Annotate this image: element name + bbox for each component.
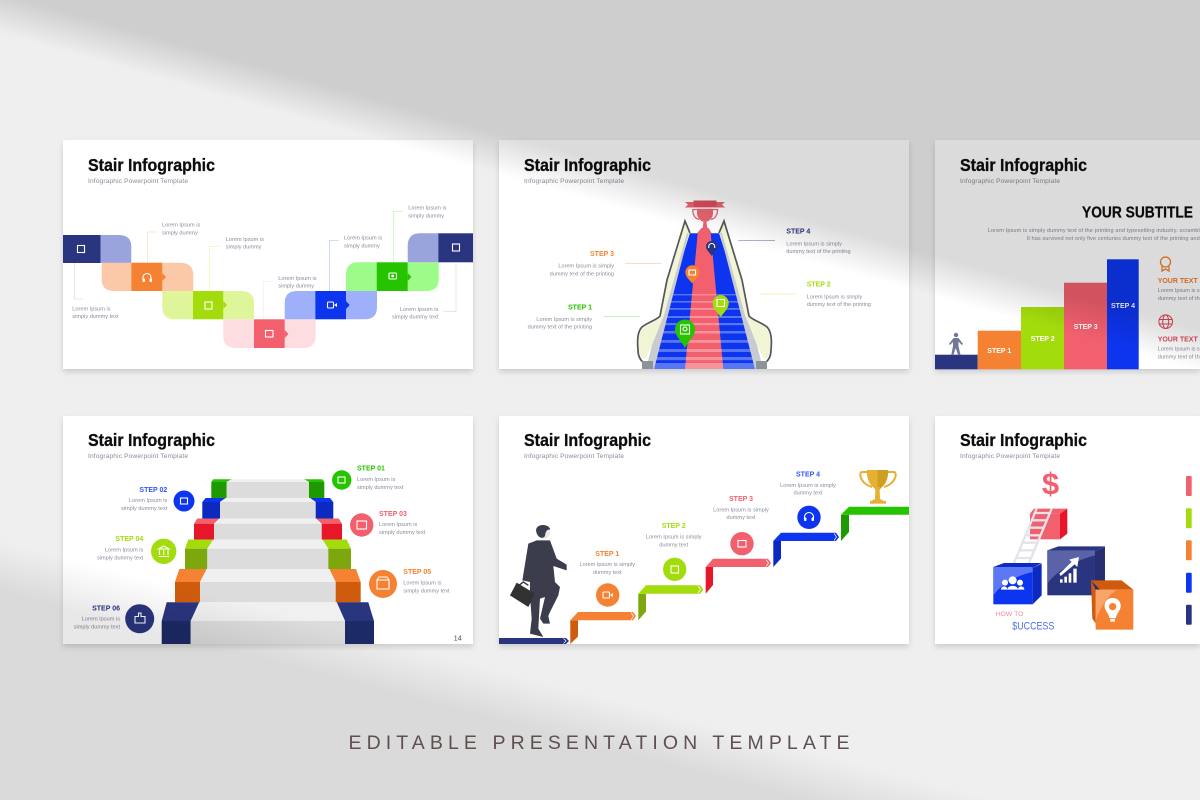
3D staircase — [162, 479, 374, 644]
step labels — [528, 228, 871, 331]
subheading: Infographic Powerpoint Template — [524, 453, 624, 460]
step 05: simply dummy text — [403, 588, 450, 594]
icons — [78, 244, 460, 337]
step 1 — [579, 551, 635, 607]
step 03 — [350, 511, 426, 537]
step labels: dummy text of the printing — [807, 302, 871, 308]
step labels: Lorem Ipsum is simply — [536, 317, 592, 323]
bar stairs chart: STEP 1 — [987, 348, 1011, 355]
step 04: Lorem Ipsum is — [105, 548, 143, 554]
step 06 — [74, 604, 154, 633]
step 02: STEP 02 — [139, 487, 167, 494]
callout text: simply dummy text — [72, 314, 119, 320]
step labels: dummy text of the printing — [550, 272, 614, 278]
3D boxes with ladder — [993, 509, 1133, 630]
step labels: STEP 2 — [807, 282, 831, 289]
panel: ribbon stairs slide — [499, 416, 909, 644]
callout text — [72, 206, 447, 321]
success label: $UCCESS — [1012, 620, 1054, 632]
callout lines — [74, 211, 456, 319]
heading: Stair Infographic — [524, 430, 651, 450]
winding stair chart — [63, 206, 473, 348]
step labels: STEP 3 — [590, 251, 614, 258]
panel: 3D stairs slide — [63, 416, 473, 644]
feature one text — [1158, 278, 1200, 302]
step 03: Lorem Ipsum is — [379, 522, 417, 528]
feature one text: YOUR TEXT — [1158, 278, 1198, 285]
step labels: dummy text of the printing — [528, 325, 592, 331]
step 2: dummy text — [659, 542, 689, 548]
how to label: HOW TO — [996, 611, 1023, 618]
step 4: dummy text — [794, 491, 823, 497]
step 4: STEP 4 — [796, 472, 820, 478]
step 06: Lorem Ipsum is — [82, 617, 120, 623]
callout text: simply dummy — [408, 214, 444, 220]
subheading: Infographic Powerpoint Template — [524, 178, 624, 185]
escalator — [638, 221, 771, 369]
intro text — [988, 228, 1200, 242]
callout text: Lorem Ipsum is — [226, 237, 264, 243]
step 3: dummy text — [727, 515, 756, 521]
step 1: STEP 1 — [595, 551, 619, 558]
callout text: Lorem Ipsum is — [400, 307, 438, 313]
heading: Stair Infographic — [524, 155, 651, 175]
heading: Stair Infographic — [960, 430, 1087, 450]
step 04 — [97, 536, 176, 564]
step 01: STEP 01 — [357, 466, 385, 473]
map pins — [675, 241, 729, 348]
step 3 — [713, 496, 769, 555]
panel: bar stairs slide — [935, 140, 1200, 369]
step labels: STEP 4 — [786, 228, 810, 235]
businessman climbing — [510, 525, 567, 637]
feature two text: Lorem Ipsum is s — [1158, 347, 1200, 353]
step 4: Lorem Ipsum is simply — [780, 483, 836, 489]
intro text: It has survived not only five centuries dummy text of the printing and — [1027, 236, 1200, 242]
step 02: Lorem Ipsum is — [129, 498, 167, 504]
step 2: Lorem Ipsum is simply — [646, 534, 702, 540]
feature two text — [1158, 336, 1200, 361]
callout text: Lorem Ipsum is — [162, 222, 200, 228]
step 04: STEP 04 — [115, 536, 143, 543]
dollar sign: $ — [1042, 466, 1059, 501]
callout text: simply dummy — [344, 243, 380, 249]
feature one text: dummy text of th — [1158, 296, 1200, 302]
step 03: STEP 03 — [379, 511, 407, 518]
step 01: Lorem Ipsum is — [357, 477, 395, 483]
step 02 — [121, 487, 194, 512]
feature two text: YOUR TEXT — [1158, 336, 1198, 343]
icon: gold trophy — [860, 470, 896, 504]
step 01 — [332, 466, 404, 491]
step 2: STEP 2 — [662, 523, 686, 530]
panel: escalator slide — [499, 140, 909, 369]
subheading: Infographic Powerpoint Template — [960, 453, 1060, 460]
callout text: Lorem Ipsum is — [408, 206, 447, 212]
step 06: simply dummy text — [74, 625, 120, 631]
step 04: simply dummy text — [97, 556, 144, 562]
colour markers — [1186, 476, 1192, 625]
icon: award badge — [1160, 257, 1170, 271]
step 2 — [646, 523, 702, 581]
feature one text: Lorem Ipsum is s — [1158, 288, 1200, 294]
heading: Stair Infographic — [88, 155, 215, 175]
bar stairs chart: STEP 3 — [1074, 324, 1098, 331]
step 05: STEP 05 — [403, 569, 431, 576]
icon: red trophy — [685, 200, 725, 234]
callout text: Lorem Ipsum is — [72, 306, 111, 312]
step 4 — [780, 472, 836, 529]
step labels: STEP 1 — [568, 305, 592, 312]
subheading: Infographic Powerpoint Template — [88, 453, 188, 460]
step 1: Lorem Ipsum is simply — [579, 562, 635, 568]
step 02: simply dummy text — [121, 506, 168, 512]
subheading: Infographic Powerpoint Template — [88, 178, 188, 185]
step 1: dummy text — [593, 570, 622, 576]
callout text: Lorem Ipsum is — [278, 276, 317, 282]
step labels: dummy text of the printing — [786, 249, 851, 255]
page number: 14 — [454, 635, 462, 642]
step 03: simply dummy text — [379, 530, 426, 536]
step 06: STEP 06 — [92, 606, 120, 612]
footer caption: EDITABLE PRESENTATION TEMPLATE — [348, 732, 850, 754]
callout text: simply dummy — [226, 245, 262, 251]
step 05 — [369, 569, 450, 598]
panel: how to success slide — [935, 416, 1200, 644]
panel: winding stair slide — [63, 140, 473, 369]
step labels: Lorem Ipsum is simply — [807, 294, 863, 300]
subheading: Infographic Powerpoint Template — [960, 178, 1060, 185]
step labels: Lorem Ipsum is simply — [786, 241, 842, 247]
bar stairs chart: STEP 4 — [1111, 303, 1135, 310]
step 3: Lorem Ipsum is simply — [713, 507, 769, 513]
callout text: simply dummy — [278, 284, 314, 290]
callout text: Lorem Ipsum is — [344, 235, 382, 241]
icon: globe — [1159, 315, 1172, 329]
bar stairs chart — [935, 259, 1139, 369]
feature two text: dummy text of th — [1158, 355, 1200, 361]
step 05: Lorem Ipsum is — [403, 580, 442, 586]
icon: walking figure — [949, 333, 963, 355]
step 3: STEP 3 — [729, 496, 753, 503]
callout text: simply dummy — [162, 230, 198, 236]
heading: Stair Infographic — [88, 430, 215, 450]
intro text: Lorem Ipsum is simply dummy text of the printing and typesetting industry. scrambl — [988, 228, 1200, 234]
bar stairs chart: STEP 2 — [1031, 336, 1055, 343]
heading: Stair Infographic — [960, 155, 1087, 175]
step labels: Lorem Ipsum is simply — [558, 264, 614, 270]
step 01: simply dummy text — [357, 485, 404, 491]
callout text: simply dummy text — [392, 315, 439, 321]
ribbon stairs — [499, 507, 909, 644]
